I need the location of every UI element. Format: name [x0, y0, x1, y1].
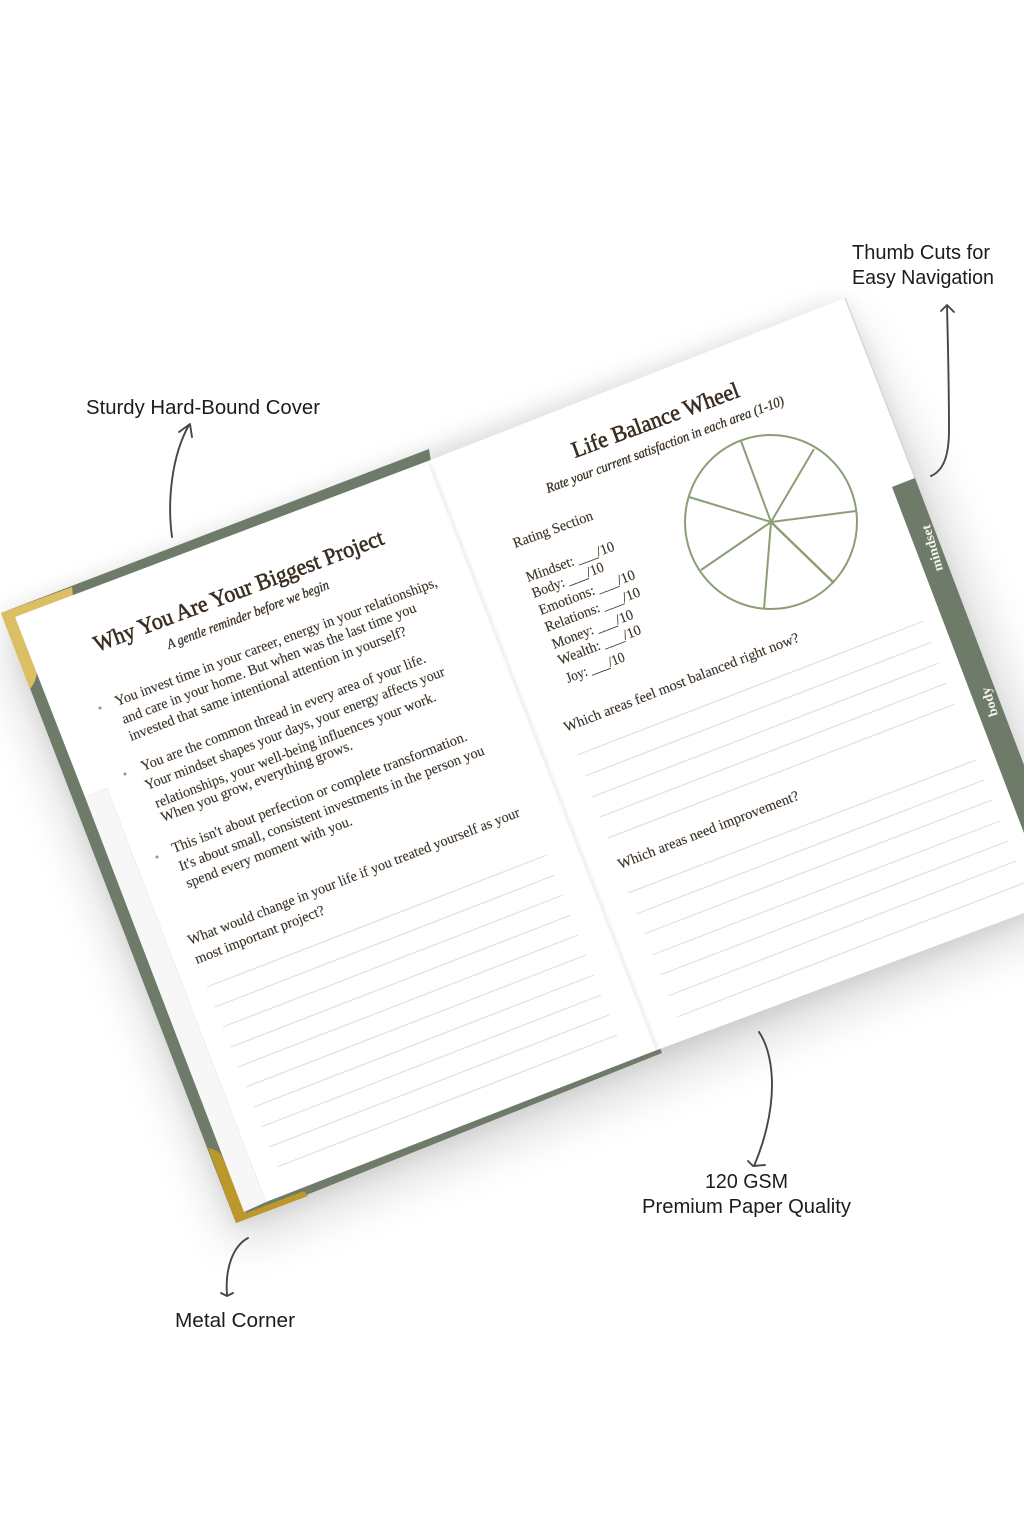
rating section: Rating Section — [511, 508, 596, 552]
open book — [1, 298, 1024, 1223]
hard-bound green cover — [1, 449, 662, 1223]
callout: paper quality: 120 GSM — [705, 1171, 788, 1193]
panel: left page content — [90, 525, 617, 1167]
callout: thumb cuts: Thumb Cuts for — [852, 242, 990, 264]
panel: right page content — [511, 378, 1024, 1017]
bullet text block one: invested that same intentional attention in yourself? — [127, 624, 409, 745]
writing lines: balanced — [577, 621, 955, 838]
thumb tab strip — [892, 478, 1024, 833]
journal question: balanced: Which areas feel most balanced right now? — [562, 630, 801, 736]
heading: why you are your biggest project: Why You Are Your Biggest Project — [90, 525, 388, 657]
bullet text block three: spend every moment with you. — [184, 813, 355, 892]
arrow: to paper — [748, 1032, 772, 1166]
rating section: Body: ___/10 — [530, 560, 606, 602]
bullet text block two: You are the common thread in every area of your life. — [139, 651, 428, 775]
left page — [15, 461, 657, 1202]
arrow: to cover — [170, 424, 192, 537]
page stack strip — [85, 788, 266, 1212]
right page — [428, 298, 1024, 1050]
arrow: to metal corner — [221, 1238, 248, 1296]
rating section: Money: ___/10 — [550, 607, 636, 653]
metal corner: top left — [1, 587, 73, 689]
gutter fold — [430, 464, 657, 1048]
subheading: Rate your current satisfaction in each area (1-10) — [543, 394, 787, 497]
thumb tab labels — [918, 523, 1001, 719]
heading: life balance wheel: Life Balance Wheel — [568, 378, 743, 463]
metal corner: bottom left — [208, 1148, 308, 1223]
bullet text block two: When you grow, everything grows. — [159, 738, 355, 826]
rating section: Emotions: ___/10 — [537, 567, 638, 619]
bullet text block two: Your mindset shapes your days, your energy affects your — [143, 664, 447, 794]
journal question: improvement: Which areas need improvement? — [616, 788, 801, 873]
rating section — [511, 508, 644, 687]
subheading: A gentle reminder before we begin — [164, 578, 331, 653]
callout: thumb cuts — [852, 242, 994, 289]
writing lines — [207, 855, 617, 1167]
chart: life balance wheel — [685, 435, 857, 609]
rating section: Wealth: ___/10 — [556, 622, 644, 669]
bullet text block three: This isn't about perfection or complete transformation. — [170, 729, 470, 857]
bullet text block one: You invest time in your career, energy in your relationships, — [113, 575, 440, 710]
journal question: most important project? — [193, 903, 327, 968]
page edge line — [845, 298, 915, 478]
tab: mindset: mindset — [918, 523, 946, 573]
bullet text block two: relationships, your well-being influences your work. — [153, 689, 439, 812]
callout: sturdy hard-bound cover: Sturdy Hard-Bound Cover — [86, 397, 320, 419]
writing lines: improvement — [628, 760, 1024, 1017]
bullet text block three: It's about small, consistent investments in the person you — [177, 743, 487, 875]
book drop shadow — [0, 298, 1024, 1245]
callout: paper quality: Premium Paper Quality — [642, 1196, 851, 1218]
rating section: Relations: ___/10 — [543, 585, 643, 636]
tab: body: body — [978, 685, 1001, 719]
callout: paper quality — [642, 1171, 851, 1218]
callout: metal corner: Metal Corner — [175, 1310, 295, 1332]
journal question: What would change in your life if you treated yourself as your — [186, 805, 522, 949]
bullet text block one: and care in your home. But when was the last time you — [120, 600, 419, 728]
arrow: to thumb cuts — [931, 305, 954, 476]
rating section: Mindset: ___/10 — [524, 539, 617, 586]
callout: thumb cuts: Easy Navigation — [852, 267, 994, 289]
rating section: Joy: ___/10 — [564, 650, 627, 687]
